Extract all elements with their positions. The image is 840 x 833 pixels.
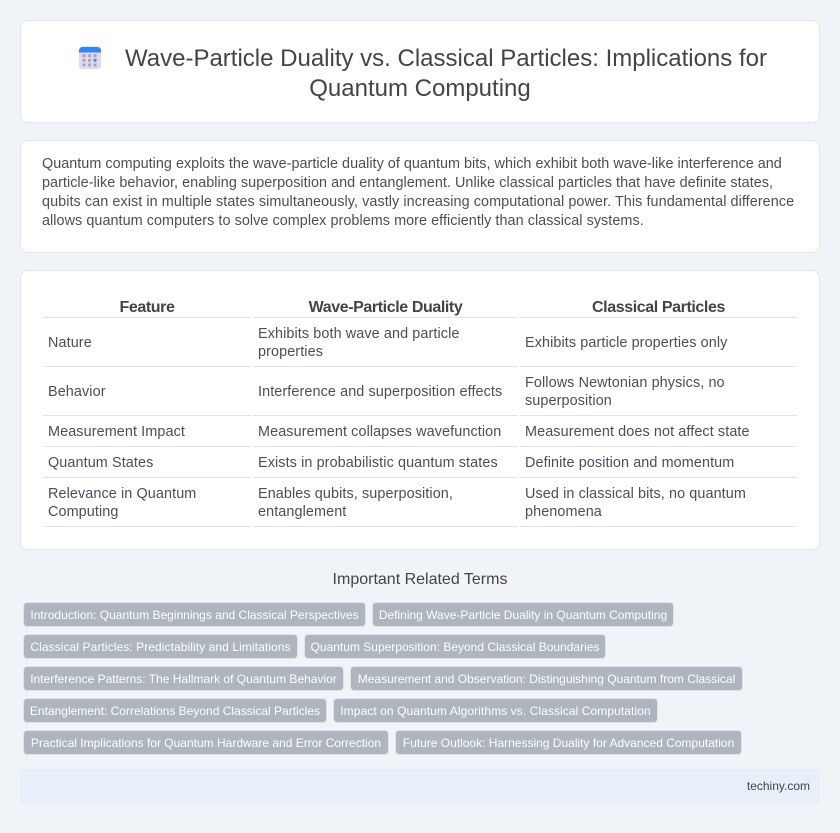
- tag: Entanglement: Correlations Beyond Classical Particles: [30, 704, 320, 718]
- tag: Practical Implications for Quantum Hardware and Error Correction: [31, 736, 381, 750]
- panel: comparison table: [20, 270, 820, 550]
- tag: Introduction: Quantum Beginnings and Classical Perspectives: [30, 608, 359, 622]
- tag: Classical Particles: Predictability and Limitations: [30, 640, 291, 654]
- tag: Quantum Superposition: Beyond Classical Boundaries: [311, 640, 599, 654]
- panel: introduction text: allows quantum computers to solve complex problems more efficiently than classical systems.: [42, 213, 644, 229]
- heading: important related terms: Important Related Terms: [333, 571, 507, 588]
- title: Quantum Computing: [309, 75, 531, 102]
- tag: [23, 602, 366, 627]
- tag: Measurement and Observation: Distinguishing Quantum from Classical: [358, 672, 735, 686]
- row: quantum states: Definite position and momentum: [525, 455, 734, 471]
- row: measurement impact: Measurement does not affect state: [525, 424, 750, 440]
- table header: classical particles: Classical Particles: [592, 299, 725, 316]
- tag: [23, 634, 298, 659]
- row: measurement impact: Measurement collapses wavefunction: [258, 424, 501, 440]
- row: quantum states: Quantum States: [48, 455, 153, 471]
- row: behavior: Interference and superposition effects: [258, 384, 502, 400]
- table header: feature: Feature: [120, 299, 174, 316]
- table header: wave-particle duality: Wave-Particle Duality: [309, 299, 462, 316]
- panel: introduction text: qubits can exist in multiple states simultaneously, vastly increasing computational power. This fundamental difference: [42, 194, 794, 210]
- footer source: techiny.com: [747, 779, 810, 793]
- row: quantum states: [48, 455, 734, 471]
- row: relevance in quantum computing: Computing: [48, 504, 118, 520]
- tag: Future Outlook: Harnessing Duality for Advanced Computation: [403, 736, 734, 750]
- row: nature: [48, 326, 728, 360]
- tag: [23, 730, 389, 755]
- title: Wave-Particle Duality vs. Classical Particles: Implications for: [125, 45, 767, 72]
- icon: calendar: [78, 46, 102, 70]
- row: behavior: [48, 375, 725, 409]
- tag list: [23, 602, 743, 755]
- title: [125, 45, 767, 102]
- tag: Interference Patterns: The Hallmark of Quantum Behavior: [30, 672, 337, 686]
- row: relevance in quantum computing: Used in classical bits, no quantum: [525, 486, 746, 502]
- row: nature: Exhibits both wave and particle: [258, 326, 459, 342]
- tag: Impact on Quantum Algorithms vs. Classical Computation: [340, 704, 651, 718]
- row: behavior: Follows Newtonian physics, no: [525, 375, 725, 391]
- tag: Defining Wave-Particle Duality in Quantum Computing: [379, 608, 667, 622]
- row: quantum states: Exists in probabilistic quantum states: [258, 455, 498, 471]
- footer: [20, 769, 820, 803]
- tag: [372, 602, 674, 627]
- row: relevance in quantum computing: Enables qubits, superposition,: [258, 486, 453, 502]
- panel: introduction text: [20, 140, 820, 253]
- row: nature: Nature: [48, 335, 92, 351]
- row: relevance in quantum computing: phenomena: [525, 504, 602, 520]
- row: behavior: superposition: [525, 393, 612, 409]
- row: nature: Exhibits particle properties only: [525, 335, 727, 351]
- row: behavior: Behavior: [48, 384, 106, 400]
- row: relevance in quantum computing: entanglement: [258, 504, 346, 520]
- row: relevance in quantum computing: Relevance in Quantum: [48, 486, 196, 502]
- row: relevance in quantum computing: [48, 486, 746, 520]
- tag: [395, 730, 742, 755]
- tag: [333, 698, 658, 723]
- tag: [350, 666, 743, 691]
- panel: header: [20, 20, 820, 123]
- panel: introduction text: particle-like behavior, enabling superposition and entanglement. Unlike classical particles that have definite states,: [42, 175, 773, 191]
- tag: [23, 698, 327, 723]
- row: measurement impact: Measurement Impact: [48, 424, 185, 440]
- tag: [304, 634, 606, 659]
- row: measurement impact: [48, 424, 750, 440]
- tag: [23, 666, 344, 691]
- row: nature: properties: [258, 344, 323, 360]
- panel: introduction text: Quantum computing exploits the wave-particle duality of quantum bits, which exhibit both wave-like interference and: [42, 156, 782, 172]
